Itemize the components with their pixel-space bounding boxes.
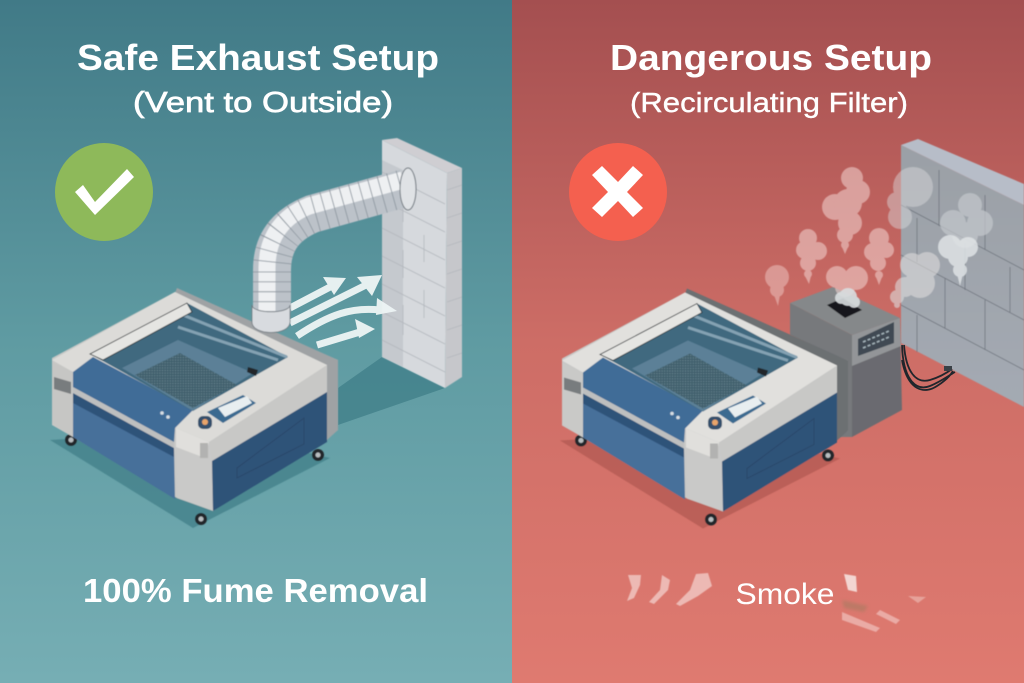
panel background: red — [512, 0, 1024, 683]
laser cutter machine — [50, 288, 338, 528]
icon: green check — [55, 143, 153, 241]
puff F over wall — [887, 167, 933, 229]
control panel — [198, 395, 256, 429]
duct wall flange — [400, 168, 416, 210]
arrows: airflow — [290, 275, 397, 345]
filter unit — [790, 287, 902, 437]
icon: red cross — [569, 143, 667, 241]
caption: smoke: Smoke — [736, 578, 834, 611]
floor shadow — [50, 430, 330, 528]
title: safe exhaust setup: Safe Exhaust Setup — [77, 37, 439, 78]
puff C — [765, 265, 789, 306]
floor shadow — [560, 430, 840, 528]
exhaust wall — [382, 138, 462, 388]
puff G over wall — [940, 193, 993, 248]
cables — [902, 345, 955, 390]
brick wall — [901, 139, 1024, 407]
smoke marks — [627, 573, 926, 632]
laser cutter machine — [560, 288, 848, 528]
puff A — [822, 167, 870, 254]
subtitle: recirculating filter: (Recirculating Filter) — [630, 87, 908, 118]
panel background: teal — [0, 0, 513, 683]
wheels — [575, 434, 834, 526]
filter outlet smoke — [835, 288, 860, 308]
caption: fume removal: 100% Fume Removal — [83, 572, 428, 609]
puff H at wall edge — [890, 252, 940, 308]
duct collar — [252, 305, 290, 332]
panel: safe setup — [0, 0, 513, 683]
smoke clouds — [765, 167, 993, 308]
puff E above filter — [826, 266, 868, 297]
wall shadow — [338, 357, 445, 425]
puff D — [864, 228, 894, 285]
wheels — [65, 434, 324, 525]
subtitle: vent to outside: (Vent to Outside) — [133, 87, 393, 119]
panel: dangerous setup — [512, 0, 1024, 683]
puff B — [796, 229, 827, 284]
control panel — [708, 396, 766, 430]
duct: flexible hose to wall — [252, 168, 416, 332]
smudge — [842, 600, 868, 612]
title: dangerous setup: Dangerous Setup — [610, 37, 932, 78]
